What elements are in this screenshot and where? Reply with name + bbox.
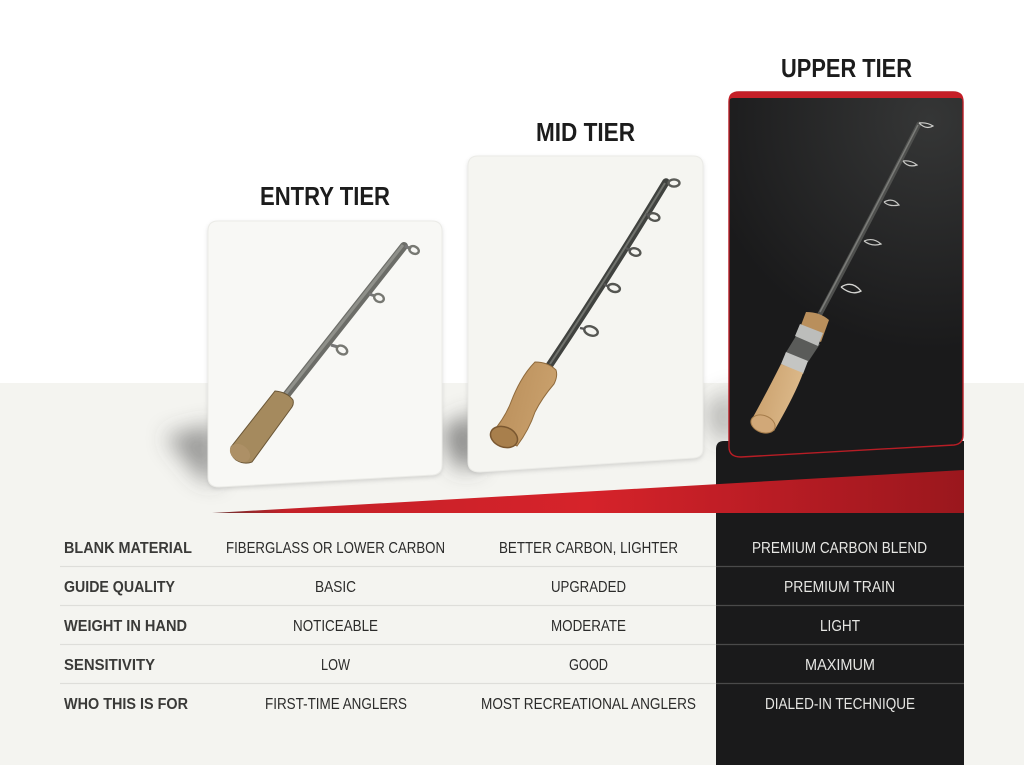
row dividers [60, 566, 964, 684]
row: weight in hand: MODERATE [551, 618, 626, 635]
row: guide quality: PREMIUM TRAIN [784, 579, 895, 596]
row: blank material [64, 540, 927, 557]
row: who this is for [64, 696, 915, 713]
row: guide quality: UPGRADED [551, 579, 626, 596]
row: sensitivity: SENSITIVITY [64, 657, 155, 674]
row: weight in hand: NOTICEABLE [293, 618, 378, 635]
heading: upper tier: UPPER TIER [781, 53, 912, 83]
panel: upper tier [729, 92, 963, 457]
cork handle: entry [231, 391, 293, 463]
red top edge [729, 92, 963, 102]
row: guide quality: BASIC [315, 579, 356, 596]
icon: entry rod [226, 245, 420, 466]
icon: mid rod [487, 179, 680, 452]
dark column [716, 441, 964, 765]
card shadows [165, 388, 738, 484]
heading: entry tier: ENTRY TIER [260, 181, 390, 211]
row: sensitivity: GOOD [569, 657, 608, 674]
row: sensitivity: MAXIMUM [805, 657, 875, 674]
row: blank material: FIBERGLASS OR LOWER CARBON [226, 540, 445, 557]
row: blank material: PREMIUM CARBON BLEND [752, 540, 927, 557]
row: who this is for: MOST RECREATIONAL ANGLERS [481, 696, 696, 713]
background floor [0, 383, 1024, 765]
grip section: upper [748, 312, 829, 436]
row: weight in hand: WEIGHT IN HAND [64, 618, 187, 635]
row: guide quality [64, 579, 895, 596]
row: sensitivity [64, 657, 875, 674]
row: sensitivity: LOW [321, 657, 351, 674]
row: blank material: BLANK MATERIAL [64, 540, 192, 557]
red wedge [212, 470, 964, 513]
row: guide quality: GUIDE QUALITY [64, 579, 175, 596]
row: blank material: BETTER CARBON, LIGHTER [499, 540, 678, 557]
panel: entry tier [208, 221, 442, 489]
row: weight in hand: LIGHT [820, 618, 860, 635]
icon: upper rod [748, 123, 933, 436]
row: weight in hand [64, 618, 860, 635]
row: who this is for: FIRST-TIME ANGLERS [265, 696, 407, 713]
cork handle: mid [491, 362, 557, 446]
row: who this is for: WHO THIS IS FOR [64, 696, 188, 713]
panel: mid tier [468, 156, 703, 474]
heading: mid tier: MID TIER [536, 117, 635, 147]
row: who this is for: DIALED-IN TECHNIQUE [765, 696, 915, 713]
